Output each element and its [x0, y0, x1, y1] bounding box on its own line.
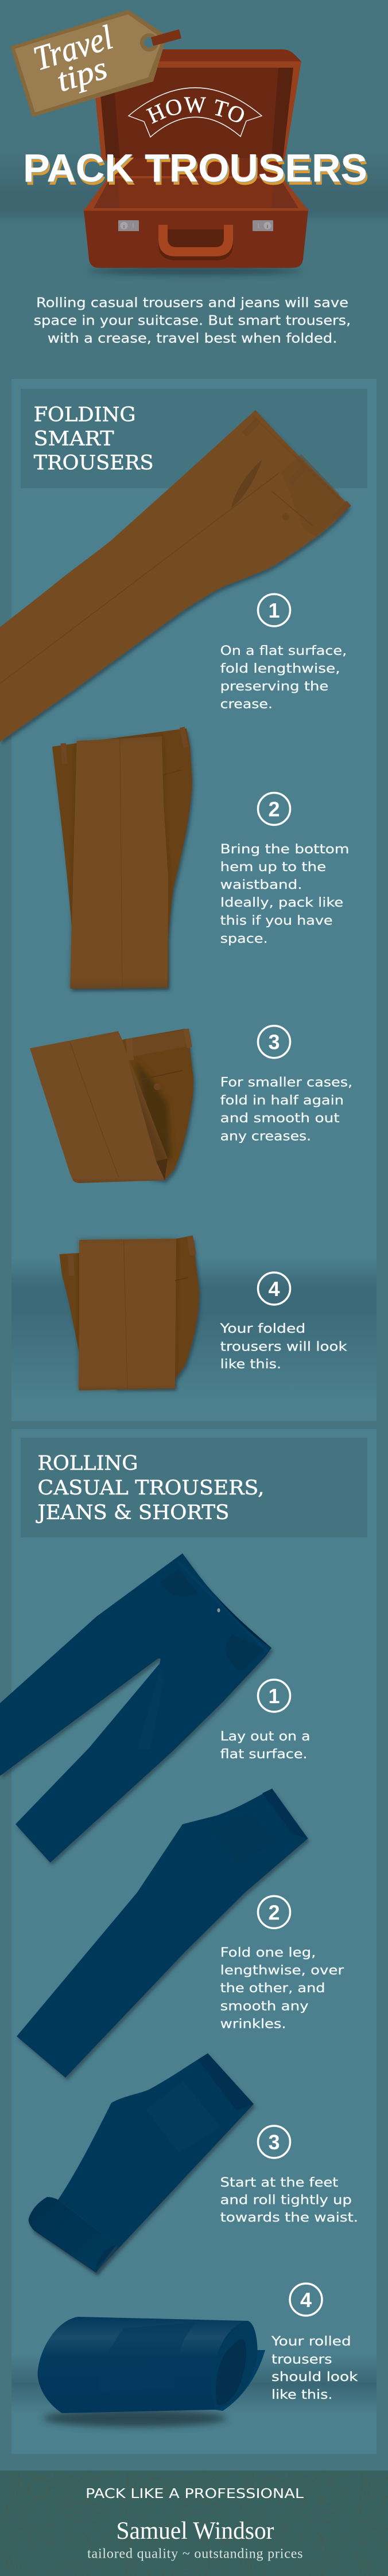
- step 1: On a flat surface,: [220, 644, 347, 658]
- heading block: rolling casual trousers, jeans and shorts: JEANS & SHORTS: [36, 1501, 229, 1524]
- step 3: and roll tightly up: [220, 2193, 352, 2208]
- step 1: 1: [268, 1684, 280, 1708]
- step 4: [219, 1273, 347, 1372]
- banner: how to: [127, 87, 263, 138]
- step 4: 4: [268, 1277, 280, 1301]
- illustration: trousers folded again: [30, 1028, 193, 1183]
- suitcase handle: [158, 225, 233, 260]
- step 2: space.: [220, 932, 268, 946]
- left clasp: [118, 220, 139, 231]
- brand tagline: tailored quality ~ outstanding prices: [87, 2546, 303, 2561]
- step 3: fold in half again: [220, 1094, 344, 1108]
- illustration: jeans folded lengthwise: [17, 1789, 308, 2078]
- intro text: [34, 296, 351, 346]
- intro text: Rolling casual trousers and jeans will save: [36, 296, 348, 311]
- step 3: any creases.: [220, 1130, 311, 1143]
- step 2: Fold one leg,: [220, 1946, 316, 1960]
- luggage tag: travel tips: Travel: [29, 18, 117, 77]
- step 1: 1: [268, 599, 280, 622]
- step 1: Lay out on a: [220, 1730, 311, 1744]
- step 1: crease.: [220, 697, 273, 712]
- step 4: Your rolled: [271, 2335, 351, 2349]
- step 2: Bring the bottom: [220, 842, 350, 857]
- step 3: and smooth out: [220, 1111, 340, 1126]
- step 2: hem up to the: [220, 860, 326, 875]
- heading block: rolling casual trousers, jeans and shorts: CASUAL TROUSERS,: [38, 1477, 264, 1500]
- step 2: lengthwise, over: [220, 1964, 344, 1978]
- illustration: jeans laid flat: [0, 1554, 271, 1863]
- hero shadow band: [0, 146, 388, 224]
- heading block: rolling casual trousers, jeans and shorts: [21, 1438, 367, 1537]
- step 4: trousers: [271, 2352, 332, 2367]
- step 2: [220, 1896, 344, 2031]
- step 1: preserving the: [220, 680, 328, 694]
- intro text: with a crease, travel best when folded.: [48, 331, 337, 346]
- heading block: rolling casual trousers, jeans and shorts: ROLLING: [38, 1452, 138, 1475]
- step 2: this if you have: [220, 914, 333, 928]
- step 4: 4: [300, 2288, 312, 2312]
- step 2: wrinkles.: [220, 2017, 286, 2031]
- step 3: 3: [268, 1031, 280, 1054]
- step 3: [220, 2126, 358, 2225]
- step 4: like this.: [271, 2388, 333, 2402]
- footer heading: PACK LIKE A PROFESSIONAL: [86, 2487, 304, 2501]
- footer: brand panel: [0, 2470, 388, 2576]
- illustration: fully rolled trousers: [37, 2317, 265, 2427]
- panel: folding smart trousers: [0, 379, 377, 1421]
- step 4: [271, 2284, 358, 2402]
- step 4: should look: [271, 2370, 358, 2384]
- heading block: folding smart trousers: TROUSERS: [34, 452, 154, 475]
- step 3: Start at the feet: [220, 2176, 339, 2190]
- step 2: Ideally, pack like: [220, 896, 343, 910]
- title: pack trousers: PACK TROUSERS: [25, 149, 369, 193]
- luggage tag: travel tips: [10, 10, 181, 117]
- step 2: the other, and: [220, 1981, 325, 1996]
- heading block: folding smart trousers: FOLDING: [34, 404, 136, 427]
- step 1: [220, 594, 347, 712]
- step 1: flat surface.: [220, 1747, 308, 1762]
- brand name: Samuel Windsor: [116, 2518, 274, 2544]
- heading block: folding smart trousers: [21, 389, 367, 489]
- heading block: folding smart trousers: SMART: [34, 428, 114, 451]
- illustration: finished folded trousers: [60, 1235, 199, 1390]
- intro text: space in your suitcase. But smart trousers,: [34, 313, 351, 328]
- step 2: [220, 793, 350, 946]
- step 3: towards the waist.: [220, 2211, 358, 2225]
- step 4: Your folded: [219, 1322, 305, 1336]
- right clasp: [253, 220, 273, 231]
- step 2: waistband.: [220, 878, 302, 892]
- title: pack trousers: PACK TROUSERS: [24, 147, 368, 190]
- step 1: [220, 1680, 311, 1762]
- step 3: For smaller cases,: [220, 1076, 352, 1090]
- illustration: jeans being rolled: [29, 2053, 254, 2273]
- step 3: [220, 1026, 352, 1143]
- illustration: trousers hem to waist: [52, 727, 192, 989]
- step 2: 2: [268, 1900, 280, 1924]
- illustration: trousers laid flat: [0, 410, 351, 742]
- step 4: like this.: [220, 1357, 281, 1372]
- step 1: fold lengthwise,: [220, 662, 340, 676]
- step 2: 2: [268, 797, 280, 821]
- panel: rolling casual trousers: [0, 1429, 377, 2454]
- banner: how to: HOW TO: [146, 97, 244, 124]
- luggage tag: travel tips: tips: [53, 50, 111, 99]
- title: pack trousers: PACK TROUSERS: [23, 146, 367, 190]
- step 4: trousers will look: [220, 1340, 347, 1355]
- step 3: 3: [268, 2130, 280, 2154]
- step 2: smooth any: [220, 1999, 309, 2014]
- illustration: open suitcase: [84, 49, 308, 275]
